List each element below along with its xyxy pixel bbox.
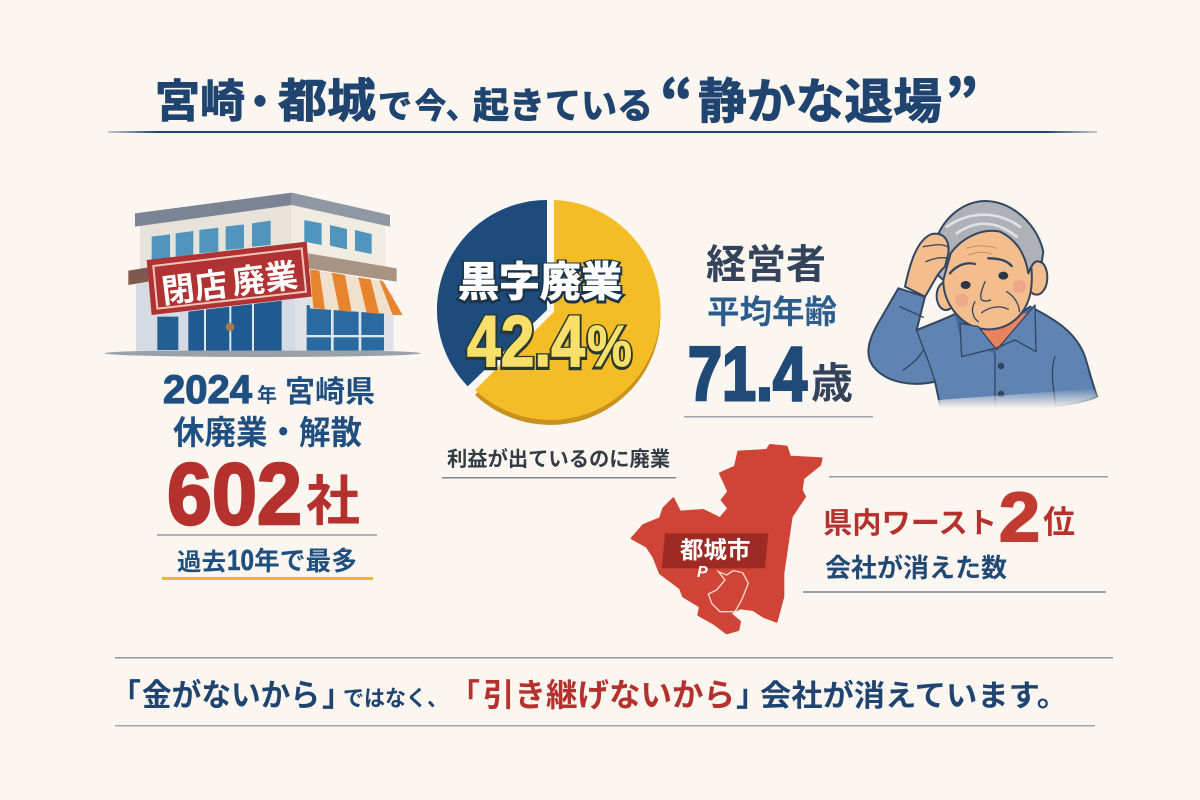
title: 都城 — [278, 65, 376, 131]
conclusion message: ではなく、 — [343, 681, 448, 713]
title: 今、 — [415, 79, 477, 128]
stat block: worst rank: 会社が消えた数 — [825, 548, 1007, 585]
sign text: 廃業 — [229, 249, 300, 304]
sign text: 閉店 — [158, 257, 230, 313]
stat block: worst rank: 県内ワースト — [823, 500, 997, 542]
pie chart: 42.4%: % — [587, 315, 632, 380]
stat block: prefecture closures: 社 — [306, 457, 360, 536]
stat block: prefecture closures: 宮崎県 — [285, 367, 375, 411]
pie chart: 42.4%: 黒字廃業 — [458, 248, 622, 308]
title: “ — [660, 55, 693, 139]
icon: worried elderly man — [868, 201, 1100, 422]
pie caption: 利益が出ているのに廃業 — [447, 442, 670, 472]
title — [155, 55, 978, 139]
conclusion message: 金がないから — [142, 670, 320, 715]
map label — [680, 531, 750, 581]
map: Miyazaki prefecture — [632, 445, 822, 633]
stat block: prefecture closures: 2024 — [163, 368, 253, 412]
stat block: average age: 平均年齢 — [707, 286, 837, 333]
title: 起きている — [473, 77, 653, 129]
conclusion message: 「 — [449, 670, 480, 715]
stat block: average age: 経営者 — [706, 232, 826, 290]
stat block: prefecture closures: 過去 — [177, 542, 226, 577]
stat block: worst rank: 2 — [999, 478, 1040, 556]
title: ” — [945, 55, 978, 139]
pie chart: 42.4%: 黒字廃業 — [458, 249, 622, 309]
stat block: prefecture closures: 年 — [257, 379, 277, 408]
stat block: prefecture closures: 602 — [167, 446, 302, 543]
conclusion message: 「 — [110, 670, 141, 715]
pie chart: 42.4% — [437, 200, 660, 425]
stat block: average age — [684, 232, 873, 418]
conclusion message: 」 — [322, 670, 353, 715]
pie chart: 42.4%: % — [587, 314, 632, 379]
title: 静かな退場 — [698, 62, 942, 132]
stat block: prefecture closures: 10 — [227, 545, 254, 577]
stat block: average age: 71.4 — [688, 332, 807, 417]
title: ・ — [240, 69, 280, 130]
stat block: prefecture closures: 休廃業・解散 — [173, 406, 362, 454]
pie chart: 42.4%: 42.4 — [467, 302, 585, 382]
map label: P — [697, 564, 708, 581]
stat block: worst rank — [803, 476, 1108, 593]
icon: closed store building — [105, 193, 421, 357]
conclusion message — [110, 657, 1113, 726]
stat block: worst rank: 位 — [1043, 497, 1075, 543]
stat block: prefecture closures — [157, 367, 377, 580]
pie chart: 42.4%: 42.4 — [467, 303, 585, 383]
conclusion message: 引き継げないから — [483, 670, 735, 716]
conclusion message: 」 — [736, 670, 767, 715]
title: で — [378, 79, 412, 128]
map label: 都城市 — [680, 531, 750, 565]
stat block: average age: 歳 — [811, 350, 853, 411]
sign text — [158, 249, 300, 313]
conclusion message: 会社が消えています。 — [760, 671, 1068, 715]
title: 宮崎 — [155, 65, 245, 130]
stat block: prefecture closures: 年で最多 — [254, 541, 357, 578]
